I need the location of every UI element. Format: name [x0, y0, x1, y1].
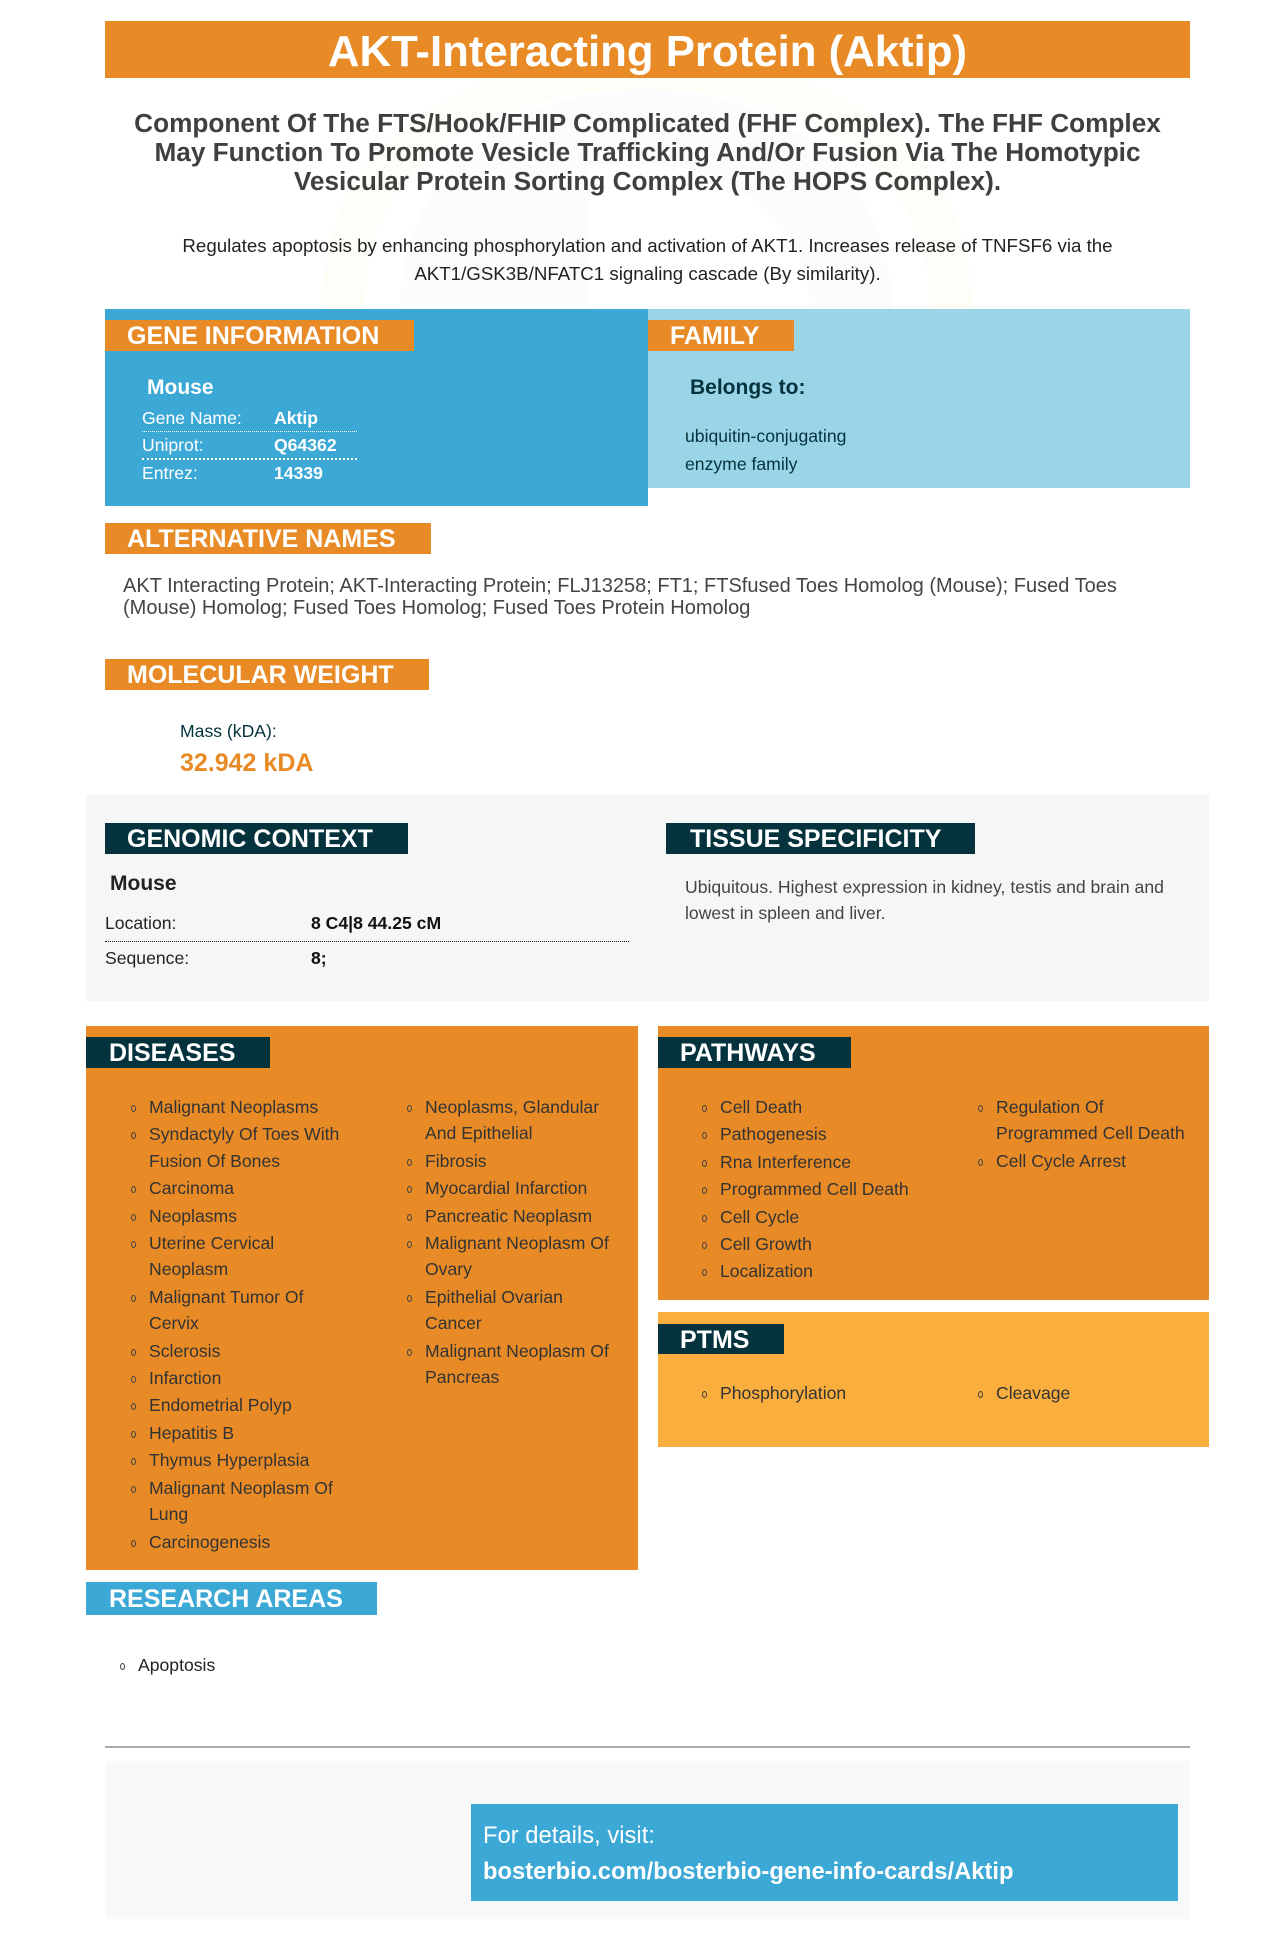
list: pathways column 2: Regulation Of Programmed Cell Death	[996, 1097, 1185, 1143]
uniprot row: Q64362	[274, 435, 337, 455]
list: diseases column 1: Endometrial Polyp	[149, 1395, 292, 1415]
list: pathways column 1: Rna Interference	[720, 1152, 851, 1172]
tissue specificity text	[685, 877, 1164, 923]
list: diseases column 1: Malignant Neoplasm Of Lung	[149, 1478, 333, 1524]
list: research areas: Apoptosis	[138, 1655, 215, 1675]
footer divider	[105, 1746, 1190, 1748]
mass value: 32.942 kDA	[180, 749, 313, 777]
alternative names text: (Mouse) Homolog; Fused Toes Homolog; Fused Toes Protein Homolog	[123, 597, 750, 619]
location row: 8 C4|8 44.25 cM	[311, 913, 441, 933]
list: diseases column 1: Carcinogenesis	[149, 1532, 270, 1552]
list: diseases column 2: Malignant Neoplasm Of Ovary	[425, 1233, 609, 1279]
alternative names text	[123, 575, 1117, 619]
list: pathways column 1: Programmed Cell Death	[720, 1179, 909, 1199]
list: pathways column 2	[978, 1097, 1185, 1171]
heading: family	[648, 320, 794, 351]
description paragraph: Regulates apoptosis by enhancing phosphorylation and activation of AKT1. Increases release of TNFSF6 via the	[182, 235, 1113, 256]
alternative names text: AKT Interacting Protein; AKT-Interacting Protein; FLJ13258; FT1; FTSfused Toes Homolog (Mouse); Fused Toes	[123, 575, 1117, 597]
heading: pathways	[658, 1037, 851, 1068]
heading: gene information: GENE INFORMATION	[127, 322, 379, 350]
heading: diseases: DISEASES	[109, 1039, 235, 1067]
subtitle	[134, 108, 1161, 196]
title banner: AKT-Interacting Protein (Aktip)	[328, 27, 967, 76]
description paragraph: AKT1/GSK3B/NFATC1 signaling cascade (By similarity).	[414, 263, 881, 284]
location row: Location:	[105, 913, 176, 933]
heading: family: FAMILY	[670, 322, 759, 350]
panel: genomic context and tissue specificity	[86, 794, 1209, 1001]
list: diseases column 2: Neoplasms, Glandular And Epithelial	[425, 1097, 599, 1143]
footer panel	[105, 1761, 1190, 1919]
list: ptms column 2: Cleavage	[996, 1383, 1070, 1403]
details link: bosterbio.com/bosterbio-gene-info-cards/Aktip	[483, 1858, 1013, 1885]
list: diseases column 1: Sclerosis	[149, 1341, 220, 1361]
heading: genomic context: GENOMIC CONTEXT	[127, 825, 373, 853]
heading: research areas	[86, 1582, 377, 1615]
subtitle: Component Of The FTS/Hook/FHIP Complicated (FHF Complex). The FHF Complex	[134, 108, 1161, 138]
family text: ubiquitin-conjugating	[685, 426, 846, 446]
list: diseases column 2	[407, 1097, 609, 1387]
belongs to label: Belongs to:	[690, 376, 806, 399]
list: diseases column 1: Malignant Neoplasms	[149, 1097, 318, 1117]
heading: tissue specificity: TISSUE SPECIFICITY	[690, 825, 941, 853]
sequence row	[105, 948, 327, 968]
family text	[685, 426, 846, 474]
call to action box	[471, 1804, 1178, 1901]
sequence row: 8;	[311, 948, 327, 968]
call to action label: For details, visit:	[483, 1822, 655, 1849]
list: diseases column 1: Syndactyly Of Toes With Fusion Of Bones	[149, 1124, 339, 1171]
entrez row: Entrez:	[142, 463, 198, 483]
list: diseases column 2: Myocardial Infarction	[425, 1178, 587, 1198]
gene name row: Gene Name:	[142, 408, 242, 428]
list: diseases column 1: Uterine Cervical Neoplasm	[149, 1233, 274, 1279]
list: pathways column 1: Localization	[720, 1261, 813, 1281]
watermark logo	[300, 70, 1000, 310]
list: diseases column 1: Malignant Tumor Of Cervix	[149, 1287, 304, 1333]
entrez row	[142, 463, 323, 483]
list: pathways column 1: Cell Growth	[720, 1234, 812, 1254]
list: diseases column 2: Pancreatic Neoplasm	[425, 1206, 592, 1226]
list: diseases column 1: Thymus Hyperplasia	[149, 1450, 309, 1470]
list: diseases column 1: Infarction	[149, 1368, 221, 1388]
list: diseases column 1: Carcinoma	[149, 1178, 234, 1198]
list: pathways column 1: Pathogenesis	[720, 1124, 827, 1144]
heading: ptms	[658, 1324, 784, 1354]
tissue specificity text: Ubiquitous. Highest expression in kidney, testis and brain and	[685, 877, 1164, 897]
panel: diseases	[86, 1026, 638, 1570]
list: diseases column 2: Malignant Neoplasm Of Pancreas	[425, 1341, 609, 1387]
sequence row: Sequence:	[105, 948, 189, 968]
list: diseases column 2: Epithelial Ovarian Cancer	[425, 1287, 563, 1333]
gene name row	[142, 405, 357, 432]
mass label: Mass (kDA):	[180, 721, 277, 741]
uniprot row	[142, 432, 357, 460]
heading: alternative names: ALTERNATIVE NAMES	[127, 525, 396, 553]
heading: molecular weight: MOLECULAR WEIGHT	[127, 661, 394, 689]
title banner	[105, 21, 1190, 78]
list: pathways column 2: Cell Cycle Arrest	[996, 1151, 1126, 1171]
uniprot row: Uniprot:	[142, 435, 204, 455]
location row	[105, 910, 629, 942]
description paragraph	[182, 235, 1113, 284]
list: pathways column 1: Cell Death	[720, 1097, 802, 1117]
subtitle: Vesicular Protein Sorting Complex (The HOPS Complex).	[294, 166, 1001, 196]
tissue specificity text: lowest in spleen and liver.	[685, 903, 886, 923]
list: diseases column 1: Neoplasms	[149, 1206, 237, 1226]
list: ptms column 1: Phosphorylation	[720, 1383, 846, 1403]
heading: diseases	[86, 1037, 270, 1068]
species label: Mouse	[147, 376, 214, 399]
family text: enzyme family	[685, 454, 797, 474]
species label: Mouse	[110, 872, 177, 895]
subtitle: May Function To Promote Vesicle Trafficking And/Or Fusion Via The Homotypic	[154, 137, 1141, 167]
heading: research areas: RESEARCH AREAS	[109, 1585, 343, 1613]
panel: ptms	[658, 1312, 1209, 1447]
gene name row: Aktip	[274, 408, 318, 428]
panel: pathways	[658, 1026, 1209, 1300]
heading: ptms: PTMS	[680, 1326, 749, 1354]
list: pathways column 1	[702, 1097, 909, 1281]
panel: family	[648, 309, 1190, 488]
list: pathways column 1: Cell Cycle	[720, 1207, 799, 1227]
list: diseases column 2: Fibrosis	[425, 1151, 487, 1171]
list: diseases column 1: Hepatitis B	[149, 1423, 234, 1443]
list: diseases column 1	[131, 1097, 339, 1552]
heading: pathways: PATHWAYS	[680, 1039, 816, 1067]
entrez row: 14339	[274, 463, 323, 483]
panel: gene information	[105, 309, 648, 506]
